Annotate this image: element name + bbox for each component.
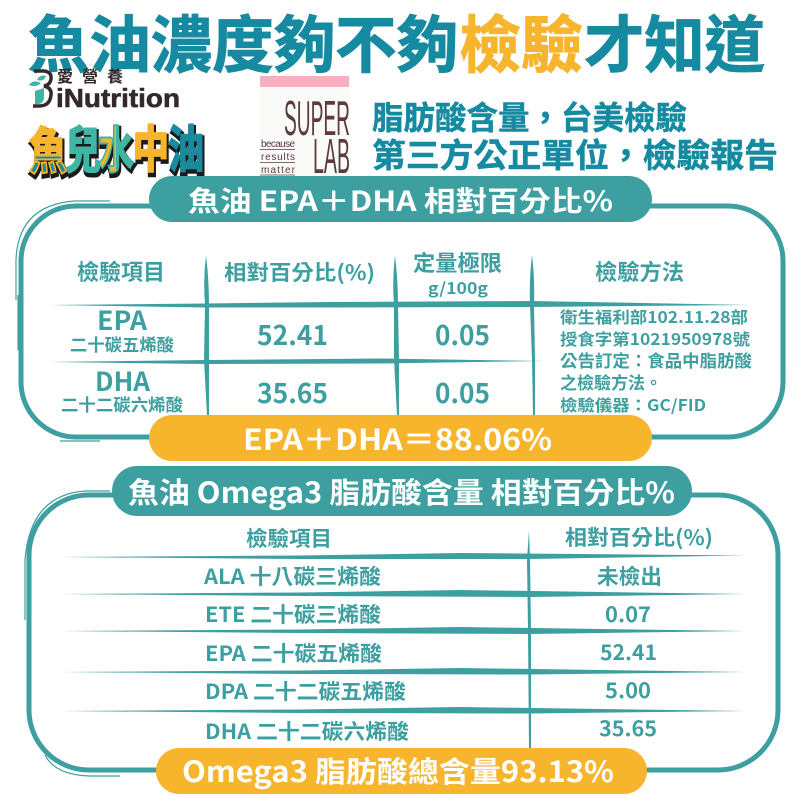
text: SUPER <box>284 92 350 146</box>
panel: Omega3 table <box>25 466 778 794</box>
row: ALA: 未檢出 <box>597 561 662 591</box>
logo: Super Lab: matter <box>261 165 296 176</box>
row: ETE: 0.07 <box>605 599 651 629</box>
logo: iNutrition: iNutrition <box>56 83 180 113</box>
text: LAB <box>313 130 350 184</box>
panel outline <box>16 201 783 441</box>
logo: iNutrition <box>29 63 180 113</box>
logo: Super Lab <box>260 76 350 184</box>
table header: 相對百分比(%) <box>224 257 375 287</box>
table header: 檢驗方法 <box>595 255 684 287</box>
row: EPA: EPA 二十碳五烯酸 <box>205 638 382 668</box>
row: DHA <box>205 713 657 746</box>
table header: 檢驗項目 <box>246 523 332 553</box>
row: DHA: 二十二碳六烯酸 <box>61 391 183 416</box>
test method text: 檢驗儀器：GC/FID <box>560 392 706 416</box>
row: EPA: 二十碳五烯酸 <box>70 331 174 356</box>
table header <box>246 522 713 553</box>
row: ALA <box>203 561 662 591</box>
logo: fish oil brand: 兒 <box>66 114 102 186</box>
row: DHA <box>61 362 490 416</box>
table header <box>77 246 684 299</box>
row: EPA: 52.41 <box>257 314 328 353</box>
logo: fish oil brand <box>29 110 205 187</box>
row: DHA: DHA 二十二碳六烯酸 <box>205 716 409 746</box>
row: DPA: 5.00 <box>605 675 651 705</box>
heading pill: EPA DHA <box>149 176 652 222</box>
table header: 定量極限 <box>413 246 502 278</box>
panel: EPA and DHA table <box>16 176 783 461</box>
test method text <box>560 304 752 416</box>
row: ETE: ETE 二十碳三烯酸 <box>205 599 381 629</box>
heading pill: Omega3: 魚油 Omega3 脂肪酸含量 相對百分比% <box>128 470 675 512</box>
logo: fish oil brand: 兒 <box>65 111 101 183</box>
heading pill: EPA DHA: 魚油 EPA＋DHA 相對百分比% <box>188 180 613 220</box>
panel outline <box>25 491 778 776</box>
row: DPA <box>205 675 651 706</box>
logo: fish oil brand: 水 <box>99 114 135 186</box>
row: EPA <box>205 637 657 668</box>
table header: 相對百分比(%) <box>565 522 713 552</box>
table header: g/100g <box>428 275 488 299</box>
row: DHA: 35.65 <box>599 713 657 743</box>
row: ETE <box>205 599 651 629</box>
row: DPA: DPA 二十二碳五烯酸 <box>205 676 406 706</box>
row: EPA: 52.41 <box>600 637 657 667</box>
row: DHA: 35.65 <box>257 372 328 411</box>
subtitle text <box>372 93 778 177</box>
row: ALA: ALA 十八碳三烯酸 <box>203 561 381 591</box>
row: EPA: 0.05 <box>435 314 490 353</box>
table grid lines <box>60 530 745 748</box>
logo: fish oil brand: 油 <box>169 113 205 185</box>
total pill: EPA+DHA: EPA＋DHA＝88.06% <box>243 417 552 459</box>
row: DHA: DHA <box>95 362 150 399</box>
logo: fish oil brand: 油 <box>168 110 204 182</box>
logo: fish oil brand: 水 <box>98 111 134 183</box>
test method text: 衛生福利部102.11.28部 <box>560 304 748 328</box>
row: EPA: EPA <box>97 301 147 338</box>
subtitle text: 第三方公正單位，檢驗報告 <box>372 129 778 177</box>
logo: iNutrition: 愛營養 <box>57 63 123 87</box>
test method text: 授食字第1021950978號 <box>560 326 750 350</box>
logo: fish oil brand: 魚 <box>29 112 67 184</box>
total pill: Omega3: Omega3 脂肪酸總含量93.13% <box>182 749 614 791</box>
table grid lines <box>50 255 750 415</box>
logo: Super Lab: results <box>261 152 295 163</box>
subtitle text: 脂肪酸含量，台美檢驗 <box>372 93 687 139</box>
test method text: 之檢驗方法。 <box>560 369 662 394</box>
test method text: 公告訂定：食品中脂肪酸 <box>560 347 752 372</box>
title <box>28 0 765 85</box>
logo: fish oil brand: 中 <box>134 113 170 185</box>
table header: 檢驗項目 <box>77 255 165 287</box>
total pill: EPA+DHA <box>149 415 652 461</box>
row: DHA: 0.05 <box>435 372 490 411</box>
logo: fish oil brand: 中 <box>133 110 169 182</box>
row: EPA <box>70 301 490 356</box>
logo: fish oil brand: 魚 <box>30 115 68 187</box>
logo: Super Lab: because <box>261 139 295 150</box>
